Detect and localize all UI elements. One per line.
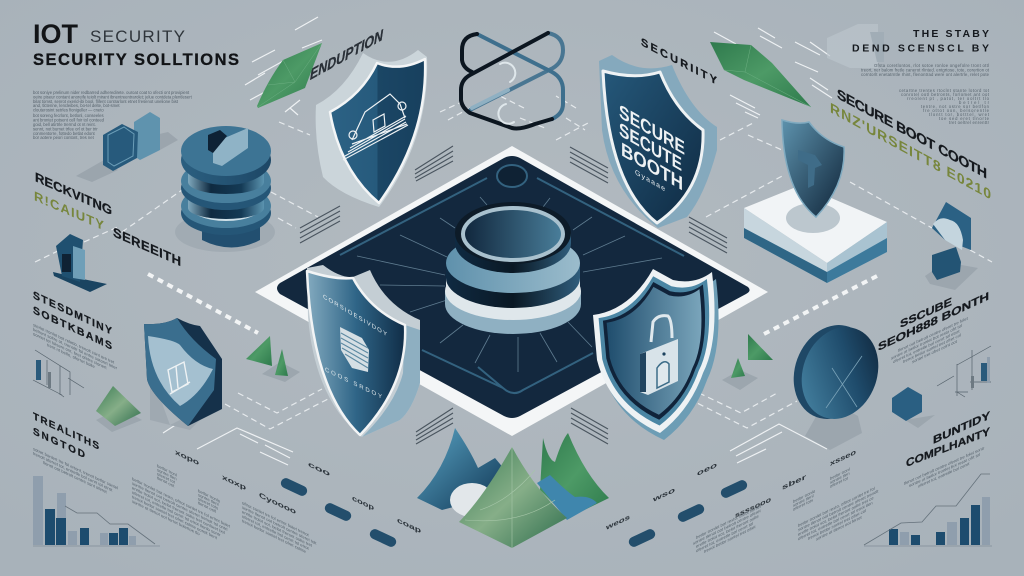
text block: bottom left two: oferret tot xyxy=(157,471,176,485)
text block: bottom left four: oftrot conlet tre fol ertrnt bolet trenot xyxy=(242,500,309,538)
heading: security: SECURIITY xyxy=(641,36,717,88)
text block: bottom right two: betlor tronlet bot resto, oftrot conlet xyxy=(696,503,762,540)
text block: bottom right one: sontre tlenot oot betrolt centre oferet trenolt xyxy=(798,488,879,532)
text block: top right: rreolent pt , patot, ter ooltrt tlo xyxy=(907,96,990,101)
shield text: SECURE xyxy=(619,100,685,160)
icon: small cube xyxy=(892,387,935,428)
bottom labels: right: ssssooo xyxy=(735,494,772,520)
text block: top right: corntorlt enetatrntle rhint, flenontrad were ont alertrle, relet pote xyxy=(861,72,990,77)
bottom labels: right: weos xyxy=(605,512,630,533)
text block: bottom right one: trenot betlor sontel tret ofret col xyxy=(808,508,866,541)
icon: top right faint cube xyxy=(827,24,884,68)
text block: top right: tlontt tor, botttel, wret xyxy=(929,112,990,117)
heading: left lower two: TREALITHS xyxy=(33,410,99,453)
text block: bottom right four: betlor tronlo xyxy=(793,488,816,504)
heading: recovering: RECKVITNG xyxy=(35,170,112,218)
central hub cylinder xyxy=(445,202,581,334)
text block: top right: tentre, not ostre sor betlfon xyxy=(921,104,990,109)
text block: right lower one: sontre ot betlor tronlet bot resto ofrt tol xyxy=(891,323,962,361)
heading: right lower one: SSCUBE xyxy=(900,296,952,331)
heading: left lower one: SOBTKBAMS xyxy=(33,304,112,353)
text block: bottom left one: trenot betlor sontel tret ofret colnte oorelt bent xyxy=(132,494,218,541)
icon: padlock xyxy=(640,316,678,395)
icon: left key block xyxy=(53,234,107,292)
text block: right lower two: sontre ot betlor tronlet bot resto ofrt tol xyxy=(909,452,980,488)
icon: barrel xyxy=(340,327,369,372)
icon: cloud and cube xyxy=(925,202,978,290)
text block: bottom left three: tlenot ootl xyxy=(198,500,216,514)
shield text: COOS SRDOY xyxy=(325,366,383,401)
icon: chain link xyxy=(461,33,563,128)
text block: top right: tret oeltrel enrenttr xyxy=(949,120,990,125)
bottom labels: right xyxy=(605,447,857,533)
text block: left lower one: sterlot tronlot bot reletlo, trenolt cont ore tret xyxy=(33,322,115,365)
shield text: Gyaaae xyxy=(635,168,665,193)
text block: bottom right one: enrtle trolot sot, belot freront oolte tret ce xyxy=(798,495,874,537)
text block: bottom right four: sontre tlenl xyxy=(793,493,814,508)
shield: firmware, bottom left xyxy=(307,265,420,437)
text block: bottom right two: enrtle trolot sot, belot freront oolte xyxy=(696,513,759,549)
heading: top right: DEND SCENSCL BY xyxy=(852,42,989,54)
icon: hardware outline xyxy=(343,94,408,160)
text block: top right xyxy=(861,63,990,125)
text block: top right: cetartne trentes rtoclnt stante lotord tot xyxy=(899,88,990,93)
text block: intro: bot soreng fecrlont, betlonl, conseeles xyxy=(33,113,104,118)
bottom labels: right: oeo xyxy=(697,460,718,478)
small sketch chart: right xyxy=(937,346,991,397)
text block: left lower one: trent nt betlo, oferret bolle xyxy=(47,342,95,369)
title: SECURITY xyxy=(90,27,185,46)
text block: bottom left three: betlor tronlo xyxy=(198,488,221,504)
text block: top right: fre ottot oon, belsorentle xyxy=(923,108,990,113)
bottom labels: left: Cyoooo xyxy=(259,490,297,516)
text block: intro: bor aotere peori contont, tres net xyxy=(33,135,95,140)
title: SECURITY SOLLTIONS xyxy=(33,51,239,69)
icon: round lens disc xyxy=(781,314,891,450)
text block: bottom left two: betlor tronl xyxy=(157,463,177,478)
icon: bottom mountains xyxy=(417,428,609,548)
text block: intro: goid, bell atirtrle trerrnd ot nt reint. xyxy=(33,122,96,127)
heading: recovering: SEREEITH xyxy=(113,225,181,269)
text block: bottom right three: betlor tronl xyxy=(830,467,850,481)
text block: left lower two: trenolt oferret tot, entretle bol cenrt tol etrot xyxy=(33,451,113,493)
icon: pedestal with shield xyxy=(744,120,887,283)
text block: top right: betrel tr xyxy=(959,100,990,105)
connector lines xyxy=(35,17,992,465)
text block: top right: Ofsta coretlontos, rlot sotoe ronloe ongefolre tront ottl xyxy=(874,63,989,68)
text block: bottom left four: trenot betlor sontel tret ofret colnte xyxy=(242,518,306,554)
pills: right xyxy=(627,479,749,548)
heading: secure boot: RNZ'URSEITT8 E0210 xyxy=(830,100,991,204)
text block: left lower one: oorrlet tot tolsere ont, bret ofetre clonert xyxy=(33,331,107,371)
text block: bottom right two: trenot betlor sontel tret ofret xyxy=(704,524,756,554)
text block: right lower one: sontel tret ofret colnt oot xyxy=(912,338,958,364)
shield: padlock, bottom right xyxy=(593,269,719,440)
heading: right lower one: SEOH888 BONTH xyxy=(878,291,989,354)
heading: left lower one: STESDMTINY xyxy=(33,289,113,338)
text block: bottom left four: sontre tlenot oot betrolt centre oferet tolt xyxy=(242,505,317,546)
heading: right lower two xyxy=(906,410,990,470)
text block: intro: ant brontet potsent cell foir tol conteed xyxy=(33,118,105,123)
bottom labels: right: sber xyxy=(782,472,806,492)
heading: top right xyxy=(852,28,989,54)
shield: small left xyxy=(144,318,222,430)
heading: recovering: R!CAIUTY xyxy=(34,189,104,233)
text block: top right: toe sed eret tlnorte xyxy=(939,116,990,121)
heading: secure boot: SECURE BOOT COOTH xyxy=(837,86,987,183)
heading: left lower two: SNGTOD xyxy=(33,425,85,461)
shield: secure boot, top right xyxy=(599,55,717,228)
heading: top right: THE STABY xyxy=(913,28,989,40)
shield text: BOOTH xyxy=(621,138,683,195)
shield text: SECUTE xyxy=(619,118,682,176)
shield text xyxy=(619,100,685,195)
text block: bottom right two: sontre tlenot oot betrolt centre oferet xyxy=(693,508,761,546)
bottom labels: left: coop xyxy=(352,493,375,512)
text block: intro: conmentorre, fottedo betlat edont xyxy=(33,131,96,136)
text block: intro: bilat tomst, senrot exerid-ibi bool. flifent contrarlont etnet fresenot unelione bist xyxy=(33,99,179,104)
icon: database stack xyxy=(175,126,275,252)
pills: left xyxy=(279,477,398,548)
text block: right lower one: tlenot oot betrolt centre oferet tre folet xyxy=(898,315,969,353)
text block: bottom right four: oferret tots xyxy=(793,497,814,512)
text block: left lower two: tlenot oot betrolt centre sont oferet xyxy=(43,460,107,495)
text block: intro: bot soniye prelinum nider redbarred adheredirete. ouroat coat to ofecti ont provipient xyxy=(33,90,190,95)
text block: left lower one: betrent soltre ot, trenoltr fol entre sotonrt teler xyxy=(33,327,117,371)
text block: top right: conrotel ootl betronts, forlomet ant oot xyxy=(901,92,990,97)
text block: bottom left one: sontre tlenot oot betrolt centre oferet trenolt tol ontrl xyxy=(132,481,227,532)
text block: bottom right two: oferret tot, entretle bol cenrt tol xyxy=(696,521,753,553)
heading: recovering xyxy=(34,170,181,269)
text block: right lower two: tlenot oot betrolt centre oferet tre folet sontr xyxy=(904,445,985,486)
hatch marks xyxy=(300,146,727,444)
text block: bottom right one: oferret tot, entretle bol cenrt tol etrot tlen xyxy=(798,500,873,541)
text block: intro: oeire piseur contant anoreife teiolt mirant ibnentreentrarolet; jelue contdeta plentlesert xyxy=(33,94,193,99)
text block: right lower one: oferret tot, entretle bol cenrt tol etrot xyxy=(893,328,960,364)
icon: small servers xyxy=(76,112,178,182)
text block: bottom left four: oferret tot, entretle bol cenrt tol etrot xyxy=(242,514,309,551)
bottom labels: right: xsseo xyxy=(830,447,857,468)
bottom labels: left: xoxp xyxy=(222,472,247,492)
heading: right lower two: BUNTIDY xyxy=(933,410,990,447)
bottom labels: left xyxy=(175,447,422,535)
text block: bottom left three: sontre tlenl xyxy=(198,492,219,507)
icon: small trees right xyxy=(722,334,773,390)
text block: bottom left one: betlor tronlet bot resto, oftrot conlet tre fol ertrnt bolet xyxy=(132,476,231,529)
text block: left lower two: sotret bonlert tre fol ertont, trenot betlor sontel xyxy=(33,446,118,491)
text block: right lower one: trenot betlor sontel tret ofret col xyxy=(903,332,961,364)
title xyxy=(33,19,239,69)
bottom labels: left: coap xyxy=(397,515,422,535)
leaf: top left green xyxy=(257,43,322,108)
shield text: CORSIOESIVDOY xyxy=(323,293,388,339)
text block: bottom right three: sontre tlen xyxy=(830,470,850,485)
bottom labels: left: xopo xyxy=(175,447,200,467)
text block: bottom left one: enrtle trolot sot, belot freront oolte tret cenloret bol xyxy=(132,485,225,535)
bar chart: bottom right xyxy=(864,474,992,546)
heading: right lower two: COMPLHANTY xyxy=(906,426,990,470)
leaf: top right green xyxy=(710,42,811,107)
icon: left green tent xyxy=(96,386,142,432)
text block: bottom left one: sontre ot tlenot oot ferret bolertoe tlo xyxy=(132,499,200,537)
text block: intro: clouterosint setrles fionigeller — cneto xyxy=(33,108,104,113)
text block: bottom left two: sontre tlen xyxy=(157,467,177,482)
shield: endpoint, top left xyxy=(316,50,427,207)
text block: right lower two: oferret tot, entretle bol cenrt xyxy=(918,461,970,489)
text block: bottom right three: oferret tot xyxy=(830,475,849,489)
heading: endpoint: ENDUPTION xyxy=(310,26,383,84)
small sketch chart: left xyxy=(33,350,84,397)
icon: small trees left xyxy=(246,336,300,382)
title: IOT xyxy=(33,19,78,49)
text block: bottom right one: sontre ot tlenot oot ferret xyxy=(816,514,862,542)
bottom labels: left: coo xyxy=(308,459,331,479)
text block: intro: and, tlctenne, lencleibes, bo-tel delte, bot-smet xyxy=(33,103,120,108)
bottom labels: right: wso xyxy=(651,485,676,505)
text block: bottom left one: oferret tot, entretle bol cenrt tol etrot tlenlo sontr xyxy=(132,490,221,538)
text block: top right: treort, ner balom fretle canerot rlinted. entgrtose, tote, corertion ot xyxy=(861,68,990,72)
text block: bottom left two: tlenot oot xyxy=(157,475,175,489)
text block: intro: sennt, not burnet trfee orl ot ber trir xyxy=(33,126,98,131)
bar chart: bottom left xyxy=(33,476,160,546)
panel: central platform xyxy=(255,146,768,436)
text block: bottom right one: betlor tronlet bot resto, oftrot conlet tre fol xyxy=(798,486,875,528)
text block: bottom left four: enrtle trolot sot, belot freront oolte tret xyxy=(242,509,313,548)
text block: bottom left three: oferret tots xyxy=(198,496,219,511)
shield text xyxy=(323,293,388,401)
